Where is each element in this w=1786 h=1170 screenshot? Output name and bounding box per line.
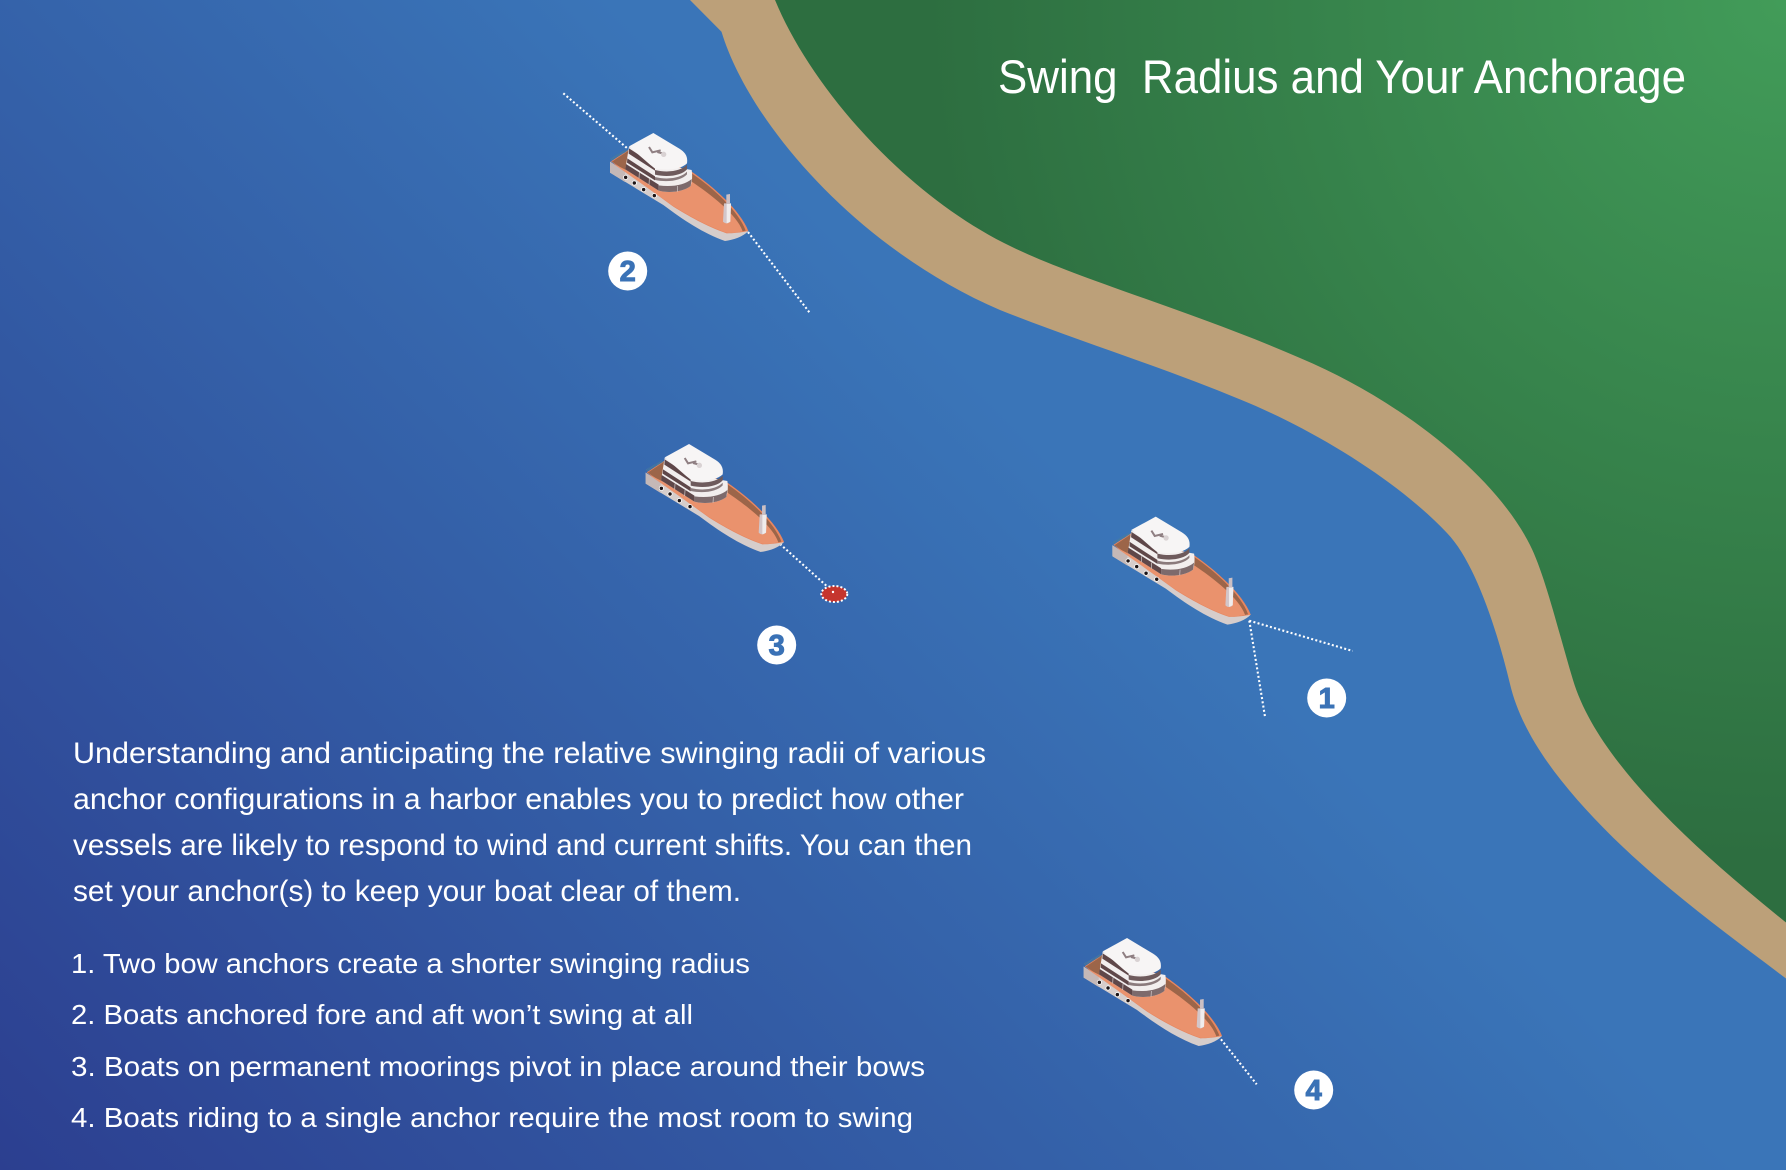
number badge 2	[608, 252, 647, 290]
boat 4: single anchor	[1084, 938, 1333, 1110]
numbered list: 4. Boats riding to a single anchor require the most room to swing	[71, 1102, 913, 1133]
numbered list: 2. Boats anchored fore and aft won’t swing at all	[71, 999, 693, 1030]
text block: introduction: Understanding and anticipating the relative swinging radii of various	[73, 737, 986, 770]
boat illustration 1	[1112, 517, 1251, 625]
anchor line: right	[1249, 621, 1353, 651]
number badge 1	[1307, 678, 1346, 718]
numbered list: 3. Boats on permanent moorings pivot in place around their bows	[71, 1051, 925, 1082]
anchor line: down	[1249, 621, 1265, 717]
number badge 4: 4	[1306, 1075, 1322, 1107]
land: green area	[775, 0, 1786, 922]
boat 2: anchored fore and aft	[563, 93, 810, 312]
anchor line	[1221, 1039, 1257, 1084]
numbered list	[71, 948, 925, 1133]
number badge 4	[1294, 1070, 1333, 1110]
mooring buoy	[821, 586, 847, 602]
text block: introduction	[73, 737, 986, 908]
anchor line: aft	[563, 93, 627, 148]
number badge 3: 3	[769, 630, 785, 662]
shoreline: sand	[690, 0, 1786, 978]
text block: introduction: vessels are likely to respond to wind and current shifts. You can then	[73, 829, 972, 862]
text block: introduction: set your anchor(s) to keep your boat clear of them.	[73, 875, 741, 908]
boat 3: permanent mooring	[646, 444, 847, 664]
number badge 1: 1	[1319, 683, 1335, 715]
anchor line: fore	[748, 232, 810, 312]
boat illustration 4	[1084, 938, 1222, 1046]
text block: introduction: anchor configurations in a harbor enables you to predict how other	[73, 783, 964, 816]
number badge 3	[757, 626, 796, 664]
boat illustration 2	[610, 133, 748, 241]
boat illustration 3	[646, 444, 784, 552]
title: Swing Radius and Your Anchorage	[998, 50, 1686, 103]
mooring line	[780, 544, 827, 586]
boat 1: two bow anchors	[1112, 517, 1353, 718]
numbered list: 1. Two bow anchors create a shorter swinging radius	[71, 948, 750, 979]
number badge 2: 2	[620, 256, 636, 288]
